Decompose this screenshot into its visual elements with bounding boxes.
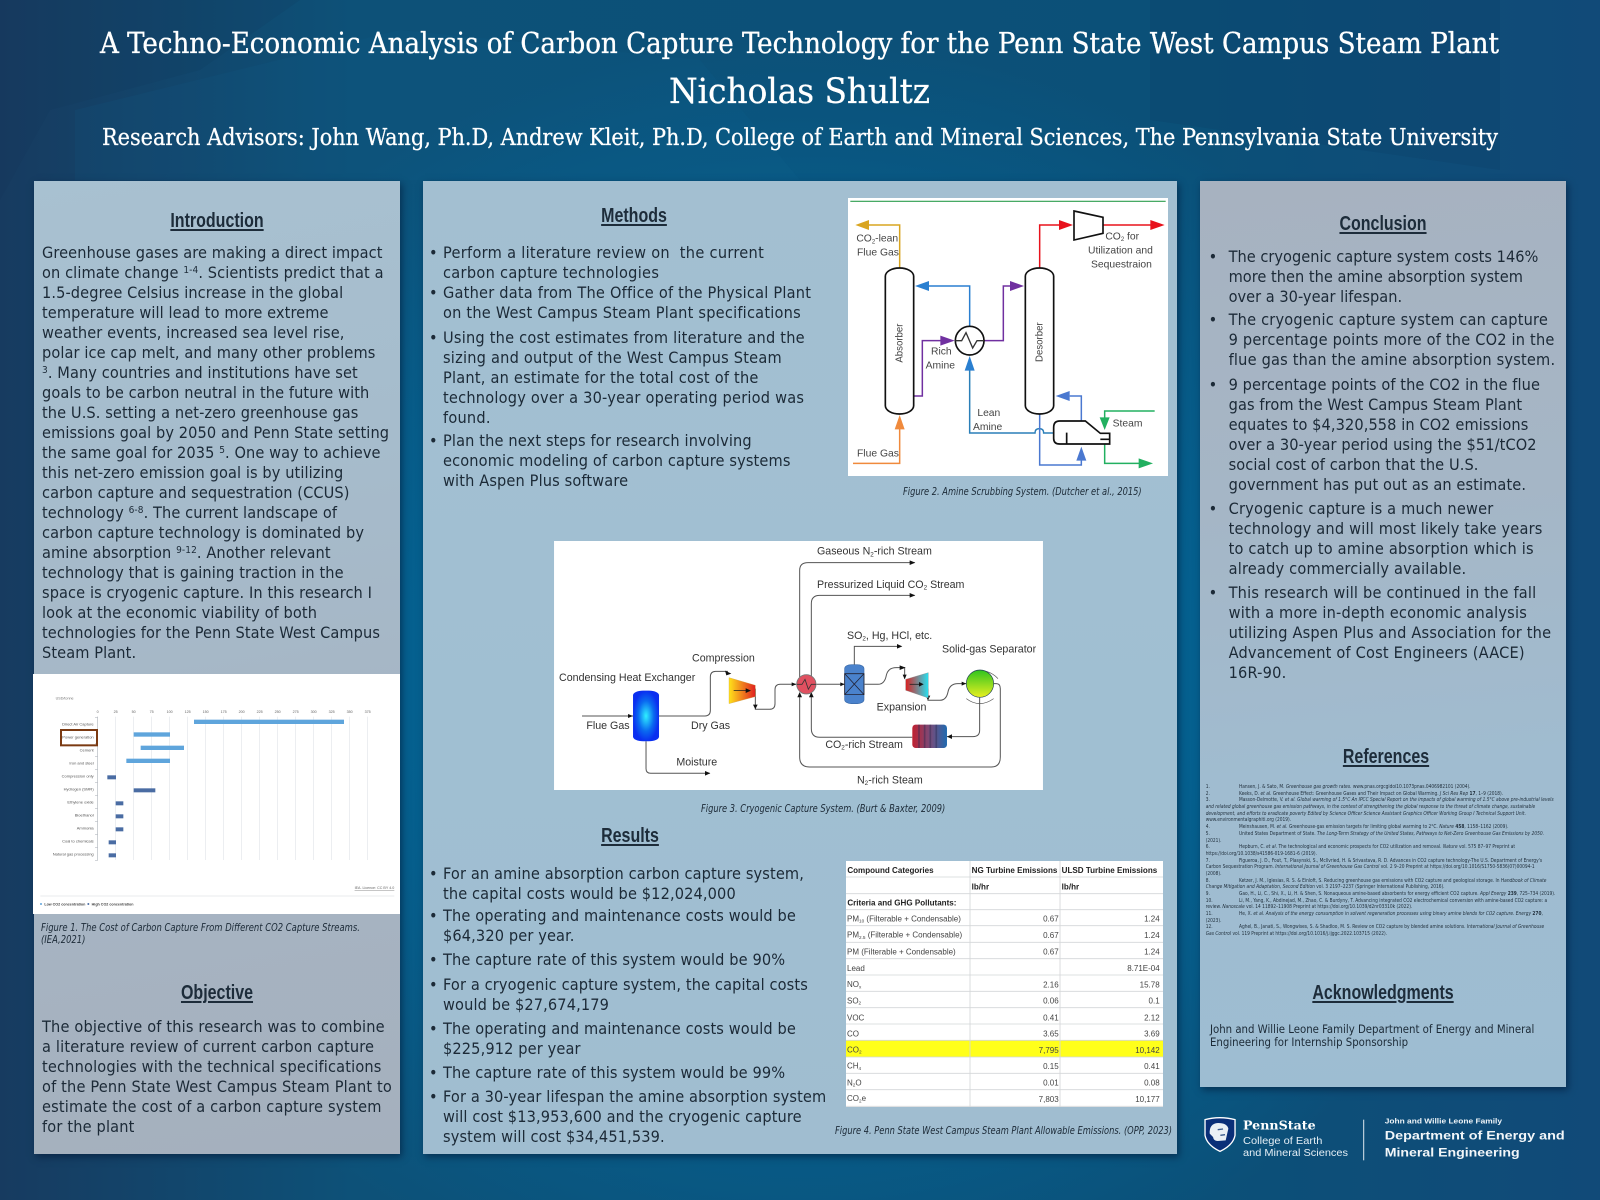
conclusion bullet 4: Cryogenic capture is a much newer	[1229, 499, 1493, 518]
text: introduction: this net-zero emission goal is by utilizing	[42, 463, 343, 482]
methods bullet 1: carbon capture technologies	[443, 263, 659, 282]
figure 3: cryogenic capture diagram: , Hg, HCl, etc.	[866, 630, 933, 642]
chart: cost of carbon capture: Coal to chemicals	[62, 839, 94, 844]
text: references list: Hepburn, C. et al. The technological and economic prospects for CO2 utilization and removal. Nature vol. 575 87–97 Preprint at	[1239, 845, 1515, 850]
chart: cost of carbon capture: 50	[132, 710, 136, 714]
conclusion bullet 2	[1229, 310, 1555, 370]
figure 3: cryogenic capture diagram	[554, 541, 1043, 790]
figure 2: amine scrubbing diagram: Sequestraion	[1091, 259, 1152, 270]
text: references list: United States Department of State. The Long-Term Strategy of the United States, Pathways to Net-Zero Greenhouse Gas Emissions by 2050.	[1239, 832, 1544, 837]
figure 2: amine scrubbing diagram: Desorber	[1034, 322, 1045, 362]
conclusion bullet 4: technology and will most likely take years	[1229, 519, 1543, 538]
author name: Nicholas Shultz	[669, 72, 930, 112]
results bullet 1: the capital costs would be $12,024,000	[443, 884, 736, 902]
text: references list: Change Mitigation and Adaptation, Second Edition vol. 3 2197–2237 (Springer International Publishing, 2016).	[1206, 885, 1445, 890]
table: allowable emissions: Compound Categories	[847, 866, 934, 875]
methods bullet 3: sizing and output of the West Campus Steam	[443, 348, 782, 367]
table: allowable emissions: N	[847, 1078, 852, 1087]
text: references list: and related global greenhouse gas emission pathways, in the context of strengthening the global response to the threat of climate change, sustainable	[1206, 805, 1535, 810]
figure 3: cryogenic capture diagram: Condensing Heat Exchanger	[559, 672, 696, 684]
conclusion bullet 5	[1229, 583, 1551, 683]
table: allowable emissions: 15.78	[1139, 980, 1160, 989]
text: references list: Gas Control vol. 119 Preprint at https://doi.org/10.1016/j.ijggc.2022.103715 (2022).	[1206, 932, 1387, 937]
text: references list: 9.	[1206, 892, 1210, 897]
table: allowable emissions: PM	[847, 914, 859, 923]
table: allowable emissions: 2	[858, 1000, 861, 1005]
figure 3: cryogenic capture diagram: Solid-gas Separator	[942, 643, 1037, 655]
text: references list: development, and efforts to eradicate poverty Edited by Science Officer Science Assistant Graphics Officer Working Group I Technical Support Unit.	[1206, 812, 1526, 817]
text: acknowledgments: John and Willie Leone Family Department of Energy and Mineral	[1210, 1023, 1534, 1036]
table: allowable emissions: (Filterable + Condensable)	[865, 930, 962, 939]
text: references list: Li, M., Yang, K., Abdinejad, M., Zhao, C. & Burdyny, T. Advancing integrated CO2 electrochemical conversion with amine-based CO2 capture: a	[1239, 899, 1547, 904]
text: introduction: 1.5-degree Celsius increase in the global	[42, 283, 343, 302]
figure 2: amine scrubbing diagram: CO	[856, 234, 872, 245]
chart: cost of carbon capture: Power generation	[62, 734, 94, 739]
chart: cost of carbon capture: 25	[114, 710, 118, 714]
text: objective: of the Penn State West Campus Steam Plant to	[42, 1076, 392, 1096]
results bullet 4: For a cryogenic capture system, the capital costs	[443, 975, 808, 994]
text: references list: 7.	[1206, 859, 1210, 864]
conclusion bullet 2: The cryogenic capture system can capture	[1229, 310, 1548, 329]
table: allowable emissions: 7,795	[1038, 1046, 1059, 1055]
logos: Penn State and department: PennState	[1243, 1117, 1316, 1132]
research advisors: Research Advisors: John Wang, Ph.D, Andrew Kleit, Ph.D, College of Earth and Mineral Sciences, The Pennsylvania State University	[102, 123, 1498, 151]
table: allowable emissions: 7,803	[1038, 1095, 1059, 1104]
table: allowable emissions: 2.12	[1144, 1013, 1160, 1022]
table: allowable emissions: CO	[847, 1029, 859, 1038]
text: introduction: technology 6-8. The current landscape of	[42, 503, 337, 522]
text: introduction: carbon capture and sequestration (CCUS)	[42, 483, 350, 502]
panel: middle column	[423, 181, 1177, 1154]
chart: cost of carbon capture: Cement	[80, 748, 95, 753]
text: references list: Meinshausen, M. et al. Greenhouse-gas emission targets for limiting global warming to 2°C. Nature 458, 1158–1162 (2009).	[1239, 825, 1508, 830]
text: acknowledgments: Engineering for Internship Sponsorship	[1210, 1036, 1408, 1049]
logos: Penn State and department: Department of Energy and	[1385, 1128, 1565, 1142]
conclusion bullet 1: over a 30-year lifespan.	[1229, 287, 1402, 306]
chart: cost of carbon capture: 175	[221, 710, 227, 714]
methods bullet 2: Gather data from The Office of the Physical Plant	[443, 283, 811, 302]
methods bullet 4: Plan the next steps for research involving	[443, 431, 752, 450]
title: A Techno-Economic Analysis of Carbon Capture Technology for the Penn State West Campus Steam Plant	[99, 26, 1500, 60]
figure 2: amine scrubbing diagram: CO	[1105, 231, 1121, 242]
methods bullet 3: Plant, an estimate for the total cost of the	[443, 368, 759, 387]
text: introduction: Steam Plant.	[42, 643, 136, 662]
caption: figure 2: Figure 2. Amine Scrubbing System. (Dutcher et al., 2015)	[903, 486, 1142, 498]
text: introduction: look at the economic viability of both	[42, 603, 317, 622]
results bullet 4	[443, 975, 808, 1015]
results bullet 4: would be $27,674,179	[443, 995, 609, 1014]
figure 2: amine scrubbing diagram	[848, 198, 1168, 476]
text: references list: Masson-Delmotte, V. et al. Global warming of 1.5°C An IPCC Special Report on the impacts of global warming of 1.5°C above pre-industrial levels	[1239, 798, 1554, 803]
table: allowable emissions: lb/hr	[971, 882, 990, 891]
chart: cost of carbon capture: Hydrogen (SMR)	[64, 787, 94, 792]
table: allowable emissions: 2	[859, 1049, 862, 1054]
text: references list: 12.	[1206, 925, 1213, 930]
figure 2: amine scrubbing diagram: Amine	[973, 422, 1003, 433]
heading: references: References	[1343, 746, 1429, 768]
figure 2: amine scrubbing diagram: 2	[1121, 237, 1125, 243]
logos: Penn State and department: College of Earth	[1243, 1136, 1323, 1147]
text: introduction: amine absorption 9-12. Another relevant	[42, 543, 331, 562]
table: allowable emissions: PM (Filterable + Condensable)	[847, 947, 956, 956]
table: allowable emissions: 0.67	[1043, 914, 1059, 923]
text: references list: (2021).	[1206, 838, 1221, 844]
chart: cost of carbon capture: Iron and steel	[69, 761, 94, 766]
text: introduction: goals to be carbon neutral in the future with	[42, 383, 369, 402]
caption: figure 1	[41, 922, 360, 946]
table: allowable emissions: Lead	[847, 964, 864, 973]
methods bullet 4: with Aspen Plus software	[443, 471, 628, 490]
text: introduction	[42, 243, 389, 662]
results bullet 3: The capture rate of this system would be 90%	[443, 950, 785, 969]
chart: cost of carbon capture: High CO2 concentration	[92, 902, 134, 906]
text: objective: for the plant	[42, 1116, 135, 1136]
text: references list: Figueroa, J. D., Fout, T., Plasynski, S., McIlvried, H. & Srivastava, R. D. Advances in CO2 capture technology-The U.S. Department of Energy's	[1239, 859, 1542, 864]
figure 3: cryogenic capture diagram: 2	[863, 635, 867, 642]
text: references list: Gao, H., Li, C., Shi, X., Li, H. & Shen, S. Nonaqueous amine-based absorbents for energy efficient CO2 capture. Appl Energy 239, 725–734 (2019).	[1239, 892, 1555, 897]
conclusion bullet 4: to catch up to amine absorption which is	[1229, 539, 1534, 558]
text: introduction: space is cryogenic capture. In this research I	[42, 583, 372, 602]
results bullet 7: For a 30-year lifespan the amine absorption system	[443, 1087, 826, 1106]
text: introduction: technologies for the Penn State West Campus	[42, 623, 380, 642]
methods bullet 2	[443, 283, 811, 323]
figure 2: amine scrubbing diagram: Rich	[931, 346, 952, 357]
text: references list: (2023).	[1206, 919, 1221, 924]
methods bullet 3: Using the cost estimates from literature and the	[443, 328, 805, 347]
table: allowable emissions: ULSD Turbine Emissions	[1061, 866, 1157, 875]
caption: figure 1: Figure 1. The Cost of Carbon Capture From Different CO2 Capture Streams.	[41, 922, 360, 934]
table: allowable emissions: x	[859, 984, 862, 989]
text: introduction: emissions goal by 2050 and Penn State setting	[42, 423, 389, 442]
conclusion bullet 2: flue gas than the amine absorption system.	[1229, 350, 1555, 369]
logos: Penn State and department: and Mineral Sciences	[1243, 1148, 1348, 1159]
text: references list: 6.	[1206, 845, 1210, 850]
table: allowable emissions: 1.24	[1144, 947, 1160, 956]
figure 3: cryogenic capture diagram: 2	[924, 584, 928, 591]
text: references list: He, X. et al. Analysis of the energy consumption in solvent regeneration processes using binary amine blends for CO2 capture. Energy 270,	[1239, 912, 1543, 917]
table: allowable emissions: 1.24	[1144, 931, 1160, 940]
figure 2: amine scrubbing diagram: Absorber	[894, 323, 905, 363]
conclusion bullet 1	[1229, 247, 1538, 307]
text: introduction: technology that is gaining traction in the	[42, 563, 344, 582]
figure 3: cryogenic capture diagram: -rich Stream	[874, 545, 932, 557]
chart: cost of carbon capture: USD/tonne	[56, 697, 74, 701]
text: references list: 5.	[1206, 832, 1210, 837]
text: references list: www.environmentalgraphiti.org (2019).	[1206, 818, 1291, 823]
panel: left column	[34, 181, 400, 1154]
conclusion bullet 4: already commercially available.	[1229, 559, 1466, 578]
chart: cost of carbon capture: 225	[257, 710, 263, 714]
results bullet 1: For an amine absorption carbon capture system,	[443, 864, 804, 882]
figure 2: amine scrubbing diagram: Utilization and	[1088, 245, 1153, 256]
table: allowable emissions: Criteria and GHG Pollutants:	[847, 898, 956, 907]
chart: cost of carbon capture: Natural gas processing	[53, 852, 94, 857]
chart: cost of carbon capture: 200	[239, 710, 245, 714]
conclusion bullet 5: 16R-90.	[1229, 663, 1286, 682]
methods bullet 3	[443, 328, 805, 428]
heading: methods: Methods	[601, 205, 667, 227]
conclusion bullet 1: more then the amine absorption system	[1229, 267, 1523, 286]
chart: cost of carbon capture: 375	[365, 710, 371, 714]
text: references list: review. Nanoscale vol. 14 11892–11908 Preprint at https://doi.org/10.1039/d2nr03310k (2022).	[1206, 905, 1412, 910]
figure 2: amine scrubbing diagram: for	[1124, 231, 1140, 242]
methods bullet 4	[443, 431, 791, 491]
figure 3: cryogenic capture diagram: Expansion	[877, 701, 927, 713]
table: allowable emissions: NG Turbine Emissions	[971, 866, 1058, 875]
table: allowable emissions: VOC	[847, 1013, 864, 1022]
figure 2: amine scrubbing diagram: Amine	[926, 361, 955, 372]
figure 3: cryogenic capture diagram: -rich Stream	[845, 739, 903, 751]
chart: cost of carbon capture: 275	[293, 710, 299, 714]
text: introduction: the same goal for 2035 5. One way to achieve	[42, 443, 381, 462]
caption: figure 3: Figure 3. Cryogenic Capture System. (Burt & Baxter, 2009)	[701, 803, 945, 815]
text: references list: 10.	[1206, 899, 1213, 904]
caption: figure 4: Figure 4. Penn State West Campus Steam Plant Allowable Emissions. (OPP, 2023)	[835, 1125, 1172, 1137]
table: allowable emissions: 0.01	[1043, 1078, 1059, 1087]
chart: cost of carbon capture: 250	[275, 710, 281, 714]
conclusion bullet 3: equates to $4,320,558 in CO2 emissions	[1229, 415, 1528, 434]
table: allowable emissions: 2.5	[859, 935, 866, 940]
figure 3: cryogenic capture diagram: Moisture	[677, 756, 718, 768]
table: allowable emissions: CH	[847, 1061, 858, 1070]
table: allowable emissions: 0.67	[1043, 947, 1059, 956]
logos: Penn State and department	[1204, 1117, 1565, 1160]
caption: figure 1: (IEA,2021)	[41, 934, 85, 946]
conclusion bullet 5: Advancement of Cost Engineers (AACE)	[1229, 643, 1525, 662]
table: allowable emissions: SO	[847, 996, 858, 1005]
heading: acknowledgments: Acknowledgments	[1312, 982, 1453, 1004]
text: introduction: weather events, increased sea level rise,	[42, 323, 345, 342]
chart: cost of carbon capture: Direct Air Capture	[62, 722, 94, 727]
text: references list: 11.	[1206, 912, 1213, 917]
conclusion bullet 5: with a more in-depth economic analysis	[1229, 603, 1527, 622]
panel: right column	[1200, 181, 1566, 1087]
chart: cost of carbon capture: Ethylene oxide	[67, 800, 94, 805]
text: references list: Hansen, J. & Sato, M. Greenhouse gas growth rates. www.pnas.orgcgidoi10.1073pnas.0406982101 (2004).	[1239, 785, 1471, 790]
methods bullet 4: economic modeling of carbon capture systems	[443, 451, 791, 470]
figure 3: cryogenic capture diagram: Pressurized Liquid CO	[817, 579, 924, 591]
chart: cost of carbon capture: 325	[329, 710, 335, 714]
results bullet 7: will cost $13,953,600 and the cryogenic capture	[443, 1107, 802, 1126]
text: objective: a literature review of current carbon capture	[42, 1036, 374, 1056]
methods bullet 3: found.	[443, 408, 491, 427]
conclusion bullet 5: This research will be continued in the fall	[1229, 583, 1536, 602]
chart: cost of carbon capture: Bioethanol	[75, 813, 94, 818]
text: references list: (2008).	[1206, 872, 1221, 877]
table: allowable emissions: 8.71E-04	[1127, 964, 1160, 973]
text: objective: estimate the cost of a carbon capture system	[42, 1096, 382, 1116]
heading: objective: Objective	[181, 982, 253, 1004]
text: references list: Aghel, B., Janati, S., Wongwises, S. & Shadloo, M. S. Review on CO2 capture by blended amine solutions. International Journal of Greenhouse	[1239, 925, 1544, 930]
table: allowable emissions: 0.67	[1043, 931, 1059, 940]
conclusion bullet 3: social cost of carbon that the U.S.	[1229, 455, 1479, 474]
conclusion bullet 3: gas from the West Campus Steam Plant	[1229, 395, 1522, 414]
text: references list: 2.	[1206, 792, 1210, 797]
table: allowable emissions: 1.24	[1144, 914, 1160, 923]
table: allowable emissions: lb/hr	[1061, 882, 1080, 891]
text: references list	[1206, 784, 1555, 937]
table: allowable emissions: 2	[859, 1098, 862, 1103]
table: allowable emissions: 10	[859, 918, 864, 923]
table: allowable emissions: CO	[847, 1045, 859, 1054]
table: allowable emissions: NO	[847, 980, 859, 989]
table: allowable emissions	[846, 861, 1163, 1107]
table: allowable emissions: (Filterable + Condensable)	[864, 914, 961, 923]
chart: cost of carbon capture: 100	[167, 710, 173, 714]
text: introduction: carbon capture technology is dominated by	[42, 523, 364, 542]
figure 2: amine scrubbing diagram: Steam	[1113, 418, 1143, 429]
table: allowable emissions: O	[855, 1078, 861, 1087]
highlight box: power generation	[61, 730, 97, 745]
figure 2: amine scrubbing diagram: Lean	[977, 408, 1001, 419]
table: allowable emissions: 2	[852, 1082, 855, 1087]
text: introduction: the U.S. setting a net-zero greenhouse gas	[42, 403, 358, 422]
figure 3: cryogenic capture diagram: 2	[842, 744, 846, 751]
table: allowable emissions: 0.06	[1043, 996, 1059, 1005]
chart: cost of carbon capture: Compression only	[62, 774, 94, 779]
table: allowable emissions: 0.08	[1144, 1078, 1160, 1087]
chart: cost of carbon capture: Ammonia	[77, 826, 94, 831]
methods bullet 1: Perform a literature review on the current	[443, 243, 764, 262]
conclusion bullet 3: government has put out as an estimate.	[1229, 475, 1526, 494]
conclusion bullet 5: utilizing Aspen Plus and Association for the	[1229, 623, 1551, 642]
heading: results: Results	[601, 825, 658, 847]
text: references list: 3.	[1206, 798, 1210, 803]
table: allowable emissions: 2.16	[1043, 980, 1059, 989]
table: allowable emissions: e	[861, 1094, 866, 1103]
results bullet 5: $225,912 per year	[443, 1039, 581, 1058]
text: references list: Ketzer, J. M., Iglesias, R. S. & Einloft, S. Reducing greenhouse gas emissions with CO2 capture and geological storage. In Handbook of Climate	[1239, 879, 1546, 884]
table: allowable emissions: 0.15	[1043, 1062, 1059, 1071]
text: objective: The objective of this research was to combine	[42, 1016, 385, 1036]
figure 2: amine scrubbing diagram: Flue Gas	[857, 248, 899, 259]
results bullet 7: system will cost $34,451,539.	[443, 1127, 665, 1146]
results bullet 5: The operating and maintenance costs would be	[443, 1019, 796, 1038]
text: objective: technologies with the technical specifications	[42, 1056, 382, 1076]
table: allowable emissions: 3.65	[1043, 1029, 1059, 1038]
results bullet 5	[443, 1019, 796, 1059]
conclusion bullet 2: 9 percentage points more of the CO2 in the	[1229, 330, 1555, 349]
results bullet 2: The operating and maintenance costs would be	[443, 906, 796, 925]
figure 2: amine scrubbing diagram: Flue Gas	[857, 448, 899, 459]
chart: cost of carbon capture: 125	[185, 710, 191, 714]
conclusion bullet 3: 9 percentage points of the CO2 in the flue	[1229, 375, 1540, 394]
chart: cost of carbon capture: 75	[150, 710, 154, 714]
chart: cost of carbon capture: 150	[203, 710, 209, 714]
text: references list: 4.	[1206, 825, 1210, 830]
figure 3: cryogenic capture diagram: SO	[847, 630, 863, 642]
chart: cost of carbon capture: Low CO2 concentration	[44, 902, 85, 906]
figure 3: cryogenic capture diagram: CO	[826, 739, 842, 751]
text: references list: Keeks, D. et al. Greenhouse Effect: Greenhouse Gases and Their Impact on Global Warming. J Sci Res Rep 17, 1–9 (2018).	[1239, 792, 1503, 797]
figure 3: cryogenic capture diagram: 2	[865, 780, 869, 787]
title	[99, 26, 1500, 151]
chart: cost of carbon capture: 300	[311, 710, 317, 714]
methods bullet 3: technology over a 30-year operating period was	[443, 388, 804, 407]
results bullet 2: $64,320 per year.	[443, 926, 574, 945]
results bullet 7	[443, 1087, 826, 1147]
heading: introduction: Introduction	[170, 210, 263, 232]
results bullet 1	[443, 864, 804, 904]
figure 3: cryogenic capture diagram: 2	[871, 551, 875, 558]
table: allowable emissions: 0.41	[1043, 1013, 1059, 1022]
text: references list: 8.	[1206, 879, 1210, 884]
conclusion bullet 4	[1229, 499, 1543, 579]
text: objective	[42, 1016, 392, 1136]
chart: cost of carbon capture: 0	[97, 710, 99, 714]
chart: cost of carbon capture: 350	[347, 710, 353, 714]
conclusion bullet 3: over a 30-year period using the $51/tCO2	[1229, 435, 1537, 454]
table: allowable emissions: CO	[847, 1094, 859, 1103]
chart: cost of carbon capture: IEA. Licence: CC BY 4.0	[355, 886, 394, 890]
table: allowable emissions: 3.69	[1144, 1029, 1160, 1038]
conclusion bullet 3	[1229, 375, 1540, 495]
text: introduction: temperature will lead to more extreme	[42, 303, 329, 322]
text: references list: 1.	[1206, 785, 1210, 790]
logos: Penn State and department: Mineral Engineering	[1385, 1145, 1520, 1159]
table: allowable emissions: PM	[847, 930, 859, 939]
table: allowable emissions: 0.41	[1144, 1062, 1160, 1071]
text: introduction: on climate change 1-4. Scientists predict that a	[42, 263, 384, 282]
figure 2: amine scrubbing diagram: -lean	[875, 234, 898, 245]
table: allowable emissions: 4	[858, 1066, 861, 1071]
chart: cost of carbon capture	[33, 674, 400, 914]
methods bullet 2: on the West Campus Steam Plant specifications	[443, 303, 801, 322]
results bullet 2	[443, 906, 796, 946]
text: references list: https://doi.org/10.1038/s41586-019-1681-6 (2019).	[1206, 852, 1317, 857]
results bullet 6: The capture rate of this system would be 99%	[443, 1062, 785, 1082]
figure 3: cryogenic capture diagram: Compression	[692, 652, 755, 664]
figure 2: amine scrubbing diagram: 2	[872, 239, 876, 245]
figure 3: cryogenic capture diagram: -rich Steam	[869, 774, 923, 786]
figure 3: cryogenic capture diagram: Gaseous N	[817, 545, 871, 557]
text: introduction: Greenhouse gases are making a direct impact	[42, 243, 383, 262]
text: introduction: 3. Many countries and institutions have set	[42, 363, 358, 382]
conclusion bullet 1: The cryogenic capture system costs 146%	[1229, 247, 1538, 266]
text: references list: Carbon Sequestration Program. International Journal of Greenhouse Gas Control vol. 2 9–20 Preprint at https://doi.org/10.1016/S1750-5836(07)00094-1	[1206, 865, 1535, 870]
figure 3: cryogenic capture diagram: Dry Gas	[691, 720, 730, 732]
heading: conclusion: Conclusion	[1339, 213, 1426, 235]
text: introduction: polar ice cap melt, and many other problems	[42, 343, 375, 362]
figure 3: cryogenic capture diagram: N	[857, 774, 865, 786]
figure 3: cryogenic capture diagram: Stream	[927, 579, 965, 591]
icon: Penn State shield	[1205, 1117, 1235, 1151]
table: allowable emissions: 10,142	[1135, 1046, 1160, 1055]
figure 3: cryogenic capture diagram: Flue Gas	[587, 720, 630, 732]
table: allowable emissions: 0.1	[1148, 996, 1160, 1005]
methods bullet 1	[443, 243, 764, 283]
table: allowable emissions: 10,177	[1135, 1095, 1160, 1104]
text: acknowledgments	[1210, 1023, 1534, 1049]
